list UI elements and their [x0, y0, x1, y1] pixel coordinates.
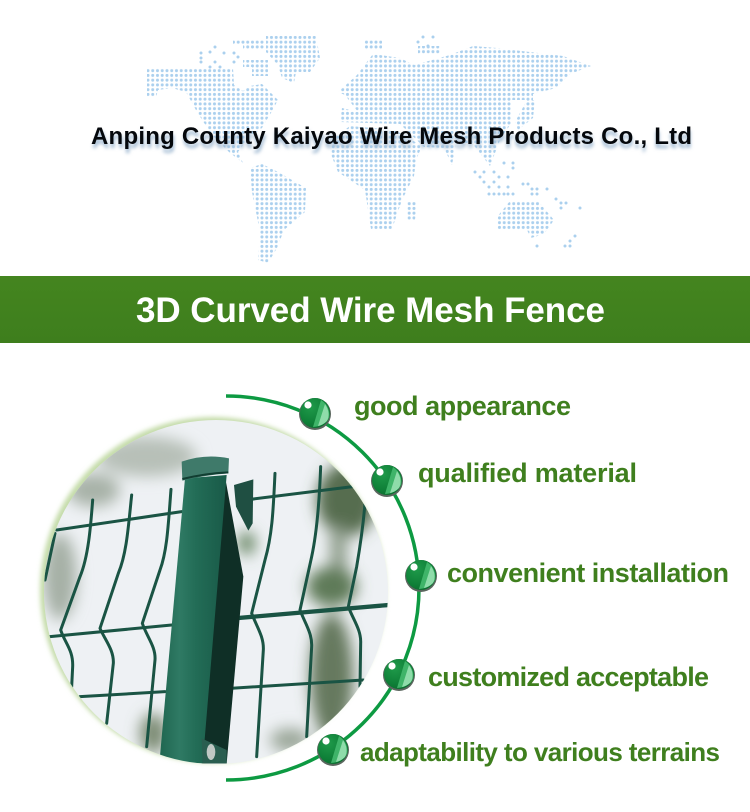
- green title band: [0, 276, 750, 343]
- australia: [497, 201, 554, 238]
- africa: [330, 126, 422, 229]
- blurred trees: [43, 437, 377, 753]
- scattered map islands: [200, 36, 582, 248]
- canada islands: [243, 60, 268, 76]
- north america: [147, 68, 278, 163]
- circle rim glow: [40, 417, 386, 763]
- greenland: [266, 36, 320, 83]
- fence post: [159, 456, 253, 763]
- company name: Anping County Kaiyao Wire Mesh Products Co., Ltd: [91, 123, 692, 150]
- curved connector line: [226, 396, 419, 780]
- europe and asia: [338, 46, 591, 166]
- world map dots: [147, 36, 591, 263]
- iceland: [364, 40, 382, 50]
- bullet sphere 1: [299, 398, 331, 430]
- label: good appearance: good appearance: [354, 391, 571, 421]
- bullet sphere 5: [317, 734, 349, 766]
- fence photo: [43, 420, 388, 764]
- label: adaptability to various terrains: adaptability to various terrains: [360, 737, 720, 767]
- label: qualified material: qualified material: [418, 458, 637, 488]
- bullet sphere 4: [383, 659, 415, 691]
- bullet sphere 2: [371, 465, 403, 497]
- label: customized acceptable: customized acceptable: [428, 662, 709, 692]
- green title band: 3D Curved Wire Mesh Fence: [136, 291, 605, 330]
- northern islands strip: [233, 40, 264, 49]
- company name: Anping County Kaiyao Wire Mesh Products Co., Ltd: [92, 127, 692, 154]
- fence wires: [45, 467, 388, 757]
- label: convenient installation: convenient installation: [447, 558, 729, 588]
- japan: [515, 100, 535, 130]
- madagascar: [407, 202, 417, 220]
- arctic russia: [418, 46, 440, 54]
- south america: [250, 164, 306, 263]
- bullet sphere 3: [405, 560, 437, 592]
